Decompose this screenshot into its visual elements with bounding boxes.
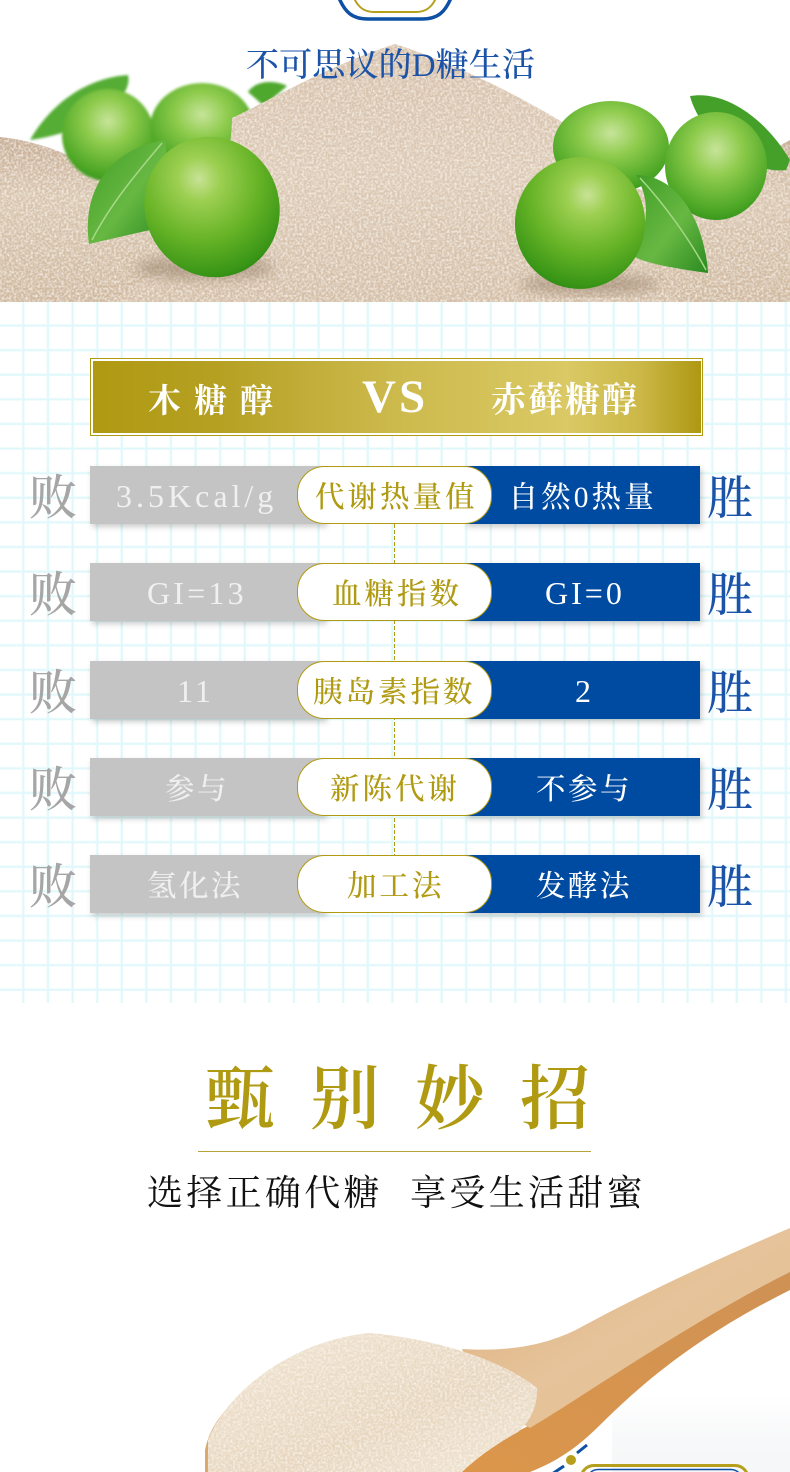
VS: VS — [362, 371, 428, 423]
metric: 血糖指数 — [332, 578, 462, 611]
spoon handle side — [440, 1270, 790, 1472]
right value: 2 — [575, 673, 591, 709]
bars — [90, 855, 700, 913]
center pill — [298, 758, 492, 816]
right value: 发酵法 — [536, 870, 632, 903]
row: 加工法 — [29, 855, 753, 914]
right heading: 赤藓糖醇 — [491, 381, 639, 420]
heading rule — [198, 1151, 591, 1152]
background panel — [612, 1395, 790, 1472]
subheading: 选择正确代糖 享受生活甜蜜 — [147, 1173, 646, 1213]
center pill — [298, 662, 492, 718]
verdict lose: 败 — [29, 569, 77, 622]
bars — [90, 758, 700, 816]
right plum — [500, 142, 660, 304]
product label fragment — [581, 1466, 748, 1472]
sand hill — [110, 44, 680, 302]
right leaf — [632, 175, 708, 273]
left plum — [121, 114, 303, 300]
right value: 不参与 — [536, 773, 632, 806]
back left leaf — [30, 75, 129, 140]
left leaf — [88, 140, 166, 244]
metric: 胰岛素指数 — [313, 676, 476, 709]
bars — [90, 661, 700, 719]
verdict win: 胜 — [707, 862, 753, 913]
dashed connector — [394, 524, 396, 855]
verdict lose: 败 — [29, 667, 77, 720]
sugar mound — [208, 1333, 537, 1472]
verdict lose: 败 — [29, 861, 77, 914]
grid background — [0, 302, 790, 1003]
spoon handle top — [462, 1228, 790, 1428]
left value: 氢化法 — [147, 870, 243, 903]
right value: 自然0热量 — [508, 481, 657, 514]
center pill — [298, 466, 492, 524]
back right leaf — [690, 95, 790, 170]
row: 新陈代谢 — [29, 758, 753, 817]
hero title: 不可思议的D糖生活 — [246, 47, 535, 84]
left heading: 木糖醇 — [148, 383, 286, 420]
back left small leaf — [248, 82, 287, 106]
plum ground shadows — [135, 256, 660, 294]
logo fragment — [339, 0, 451, 19]
center pill — [298, 856, 492, 912]
verdict win: 胜 — [707, 668, 753, 719]
back right plums — [553, 101, 767, 220]
row: 血糖指数 — [29, 563, 753, 622]
left value: GI=13 — [147, 575, 247, 611]
wooden spoon with sugar — [205, 1228, 790, 1472]
verdict win: 胜 — [707, 473, 753, 524]
metric: 代谢热量值 — [315, 481, 478, 514]
left value: 11 — [177, 673, 214, 709]
left value: 3.5Kcal/g — [116, 478, 277, 514]
sand ground — [0, 137, 790, 302]
section heading: 甄别妙招 — [205, 1062, 625, 1139]
left value: 参与 — [165, 773, 229, 806]
bars — [90, 563, 700, 621]
right value: GI=0 — [545, 575, 625, 611]
verdict win: 胜 — [707, 765, 753, 816]
verdict win: 胜 — [707, 570, 753, 621]
comparison header bar — [90, 358, 702, 436]
verdict lose: 败 — [29, 764, 77, 817]
spoon bowl edge — [205, 1395, 300, 1472]
row: 代谢热量值 — [29, 466, 753, 525]
row: 胰岛素指数 — [29, 661, 753, 720]
center pill — [298, 564, 492, 620]
metric: 新陈代谢 — [330, 773, 460, 806]
ribbon accent — [552, 1445, 587, 1472]
bars — [90, 466, 700, 524]
hero: sugar pile with green plums — [0, 44, 790, 304]
verdict lose: 败 — [29, 472, 77, 525]
back left plums — [62, 83, 254, 181]
metric: 加工法 — [347, 870, 445, 903]
